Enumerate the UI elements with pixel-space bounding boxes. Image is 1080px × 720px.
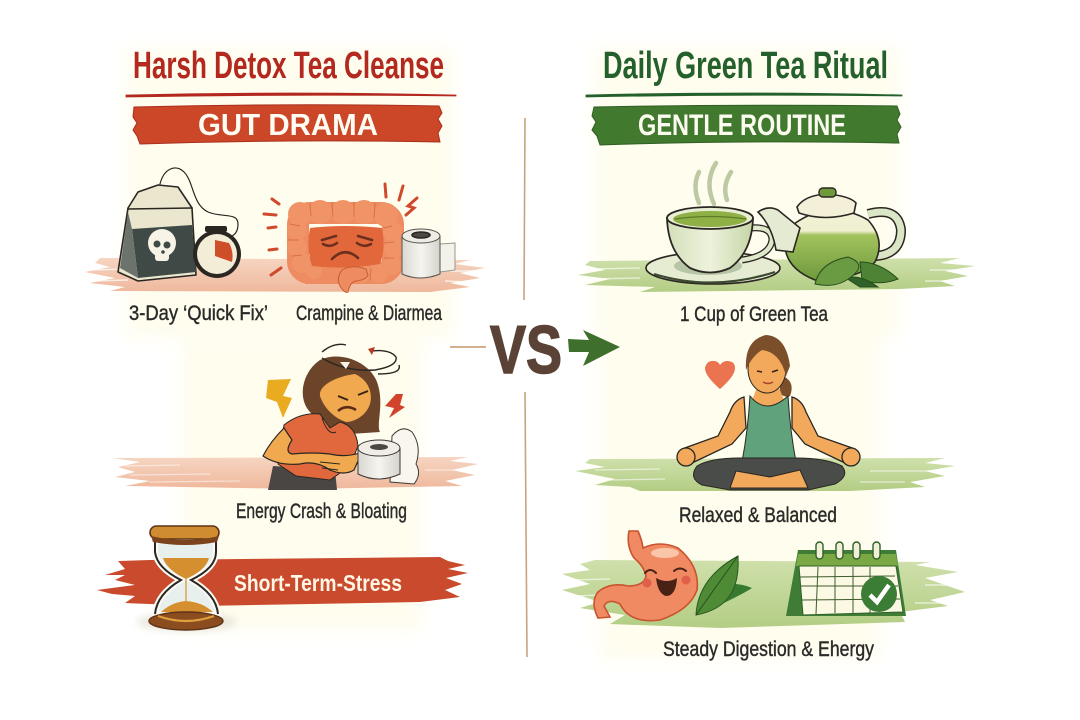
brush stroke: peach band two <box>112 457 478 489</box>
icon: skull <box>148 229 176 261</box>
face <box>320 374 371 422</box>
label: 3-day quick fix: 3-Day ‘Quick Fix’ <box>129 302 268 325</box>
cream paper backdrops <box>126 48 900 660</box>
icon: leaves <box>696 556 752 615</box>
banner: gentle routine: GENTLE ROUTINE <box>638 109 846 142</box>
icon: happy stomach <box>594 531 697 621</box>
label: steady digestion and energy: Steady Digestion & Ehergy <box>663 638 874 661</box>
icon: stopwatch <box>193 226 241 278</box>
lid <box>797 194 856 218</box>
pot <box>785 210 879 280</box>
neck <box>752 385 784 408</box>
shirt <box>278 414 358 480</box>
title underline <box>586 93 902 97</box>
panel: harsh detox tea cleanse <box>85 45 485 631</box>
icon: detox tea bag with skull <box>118 168 238 281</box>
connector dash <box>450 346 486 348</box>
hair <box>746 335 790 376</box>
panel: daily green tea ritual <box>562 45 975 661</box>
ponytail <box>780 375 792 397</box>
icon: green teapot <box>758 188 901 280</box>
arrow <box>568 330 620 366</box>
banner: short-term stress <box>97 557 468 606</box>
body <box>667 218 753 272</box>
hair <box>303 356 380 434</box>
icon: tea leaves <box>815 257 898 287</box>
heading: right title: Daily Green Tea Ritual <box>603 45 888 87</box>
handle <box>868 212 901 256</box>
icon: heart <box>705 361 735 389</box>
dizzy swirl <box>322 344 399 374</box>
arms <box>263 428 362 473</box>
icon: pain marks <box>264 184 417 275</box>
icon: meditating woman <box>677 335 860 490</box>
label: 1 cup of green tea: 1 Cup of Green Tea <box>680 303 828 326</box>
vs badge <box>450 312 620 388</box>
icon: woman with stomach ache <box>263 344 399 490</box>
icon: red lightning bolt <box>385 394 405 418</box>
face <box>748 345 786 393</box>
brush stroke: green band one <box>578 258 975 292</box>
label: energy crash and bloating: Energy Crash & Bloating <box>236 500 407 523</box>
label: cramping and diarrhea: Crampine & Diarmea <box>296 302 442 325</box>
heading: left title: Harsh Detox Tea Cleanse <box>133 45 444 87</box>
tank top <box>742 396 796 462</box>
icon: calendar with check <box>786 542 906 616</box>
icon: toilet paper roll <box>402 229 455 278</box>
brush stroke: green band three <box>562 560 965 628</box>
saucer <box>646 252 780 284</box>
spout <box>758 208 800 252</box>
icon: yellow lightning bolt <box>266 379 292 418</box>
steam <box>696 163 731 204</box>
banner: short-term stress: Short-Term-Stress <box>234 570 402 596</box>
center divider <box>524 118 527 657</box>
icon: green tea cup on saucer <box>646 163 780 284</box>
icon: unhappy intestine <box>287 200 404 292</box>
trousers <box>268 466 337 490</box>
banner: gut drama <box>133 105 442 144</box>
arms <box>682 397 746 463</box>
legs <box>693 458 845 490</box>
vs text: VS <box>490 312 562 388</box>
banner: gut drama: GUT DRAMA <box>198 107 378 142</box>
brush stroke: peach band one <box>85 258 485 292</box>
icon: roll and cloud <box>358 429 419 484</box>
brush stroke: green band two <box>575 458 955 491</box>
title underline <box>126 93 456 97</box>
icon: hourglass <box>137 526 237 631</box>
label: relaxed and balanced: Relaxed & Balanced <box>679 504 837 527</box>
handle <box>742 228 772 260</box>
